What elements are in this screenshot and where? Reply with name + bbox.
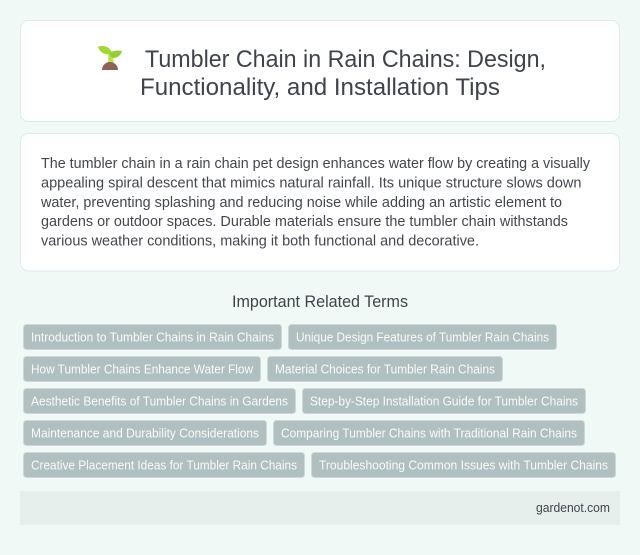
- tag: introduction: [24, 324, 282, 350]
- panel: description card: [20, 134, 620, 271]
- tag: maintenance: [24, 420, 266, 446]
- text block: description: water, preventing splashing and reducing noise while adding an artistic element to: [40, 194, 562, 211]
- icon: seedling: [98, 46, 122, 70]
- text block: description: various weather conditions, making it both functional and decorative.: [41, 232, 479, 250]
- tag: unique design: [288, 324, 556, 350]
- tag: creative placement: [24, 452, 304, 478]
- tag: maintenance: Maintenance and Durability Considerations: [31, 426, 259, 440]
- text block: description: [40, 155, 590, 250]
- title: Tumbler Chain in Rain Chains: Design,: [145, 46, 546, 73]
- tag: unique design: Unique Design Features of Tumbler Rain Chains: [296, 330, 549, 344]
- text block: description: The tumbler chain in a rain chain pet design enhances water flow by creating a visually: [41, 155, 590, 172]
- title: Functionality, and Installation Tips: [140, 74, 500, 101]
- tag: troubleshooting: Troubleshooting Common Issues with Tumbler Chains: [319, 458, 608, 472]
- heading: related terms: Important Related Terms: [232, 293, 408, 311]
- tag: comparison: [274, 420, 584, 446]
- text block: description: appealing spiral descent that mimics natural rainfall. Its unique structure slows down: [41, 174, 582, 192]
- footer: [20, 491, 620, 525]
- tag: comparison: Comparing Tumbler Chains with Traditional Rain Chains: [281, 426, 577, 440]
- tag: introduction: Introduction to Tumbler Chains in Rain Chains: [31, 330, 274, 344]
- tag: material choices: [268, 356, 502, 382]
- panel: title card: [20, 20, 620, 122]
- panel: related term tags: [24, 324, 616, 478]
- tag: water flow: [24, 356, 260, 382]
- tag: installation guide: Step-by-Step Installation Guide for Tumbler Chains: [310, 394, 578, 408]
- tag: material choices: Material Choices for Tumbler Rain Chains: [275, 362, 495, 376]
- text block: description: gardens or outdoor spaces. Durable materials ensure the tumbler chain withstands: [41, 213, 568, 230]
- title: [140, 46, 546, 101]
- tag: creative placement: Creative Placement Ideas for Tumbler Rain Chains: [31, 458, 297, 472]
- tag: troubleshooting: [312, 452, 616, 478]
- tag: installation guide: [302, 388, 586, 414]
- tag: aesthetic benefits: [24, 388, 296, 414]
- tag: aesthetic benefits: Aesthetic Benefits of Tumbler Chains in Gardens: [31, 394, 288, 408]
- tag: water flow: How Tumbler Chains Enhance Water Flow: [31, 362, 254, 376]
- footer source: gardenot.com: [536, 500, 610, 515]
